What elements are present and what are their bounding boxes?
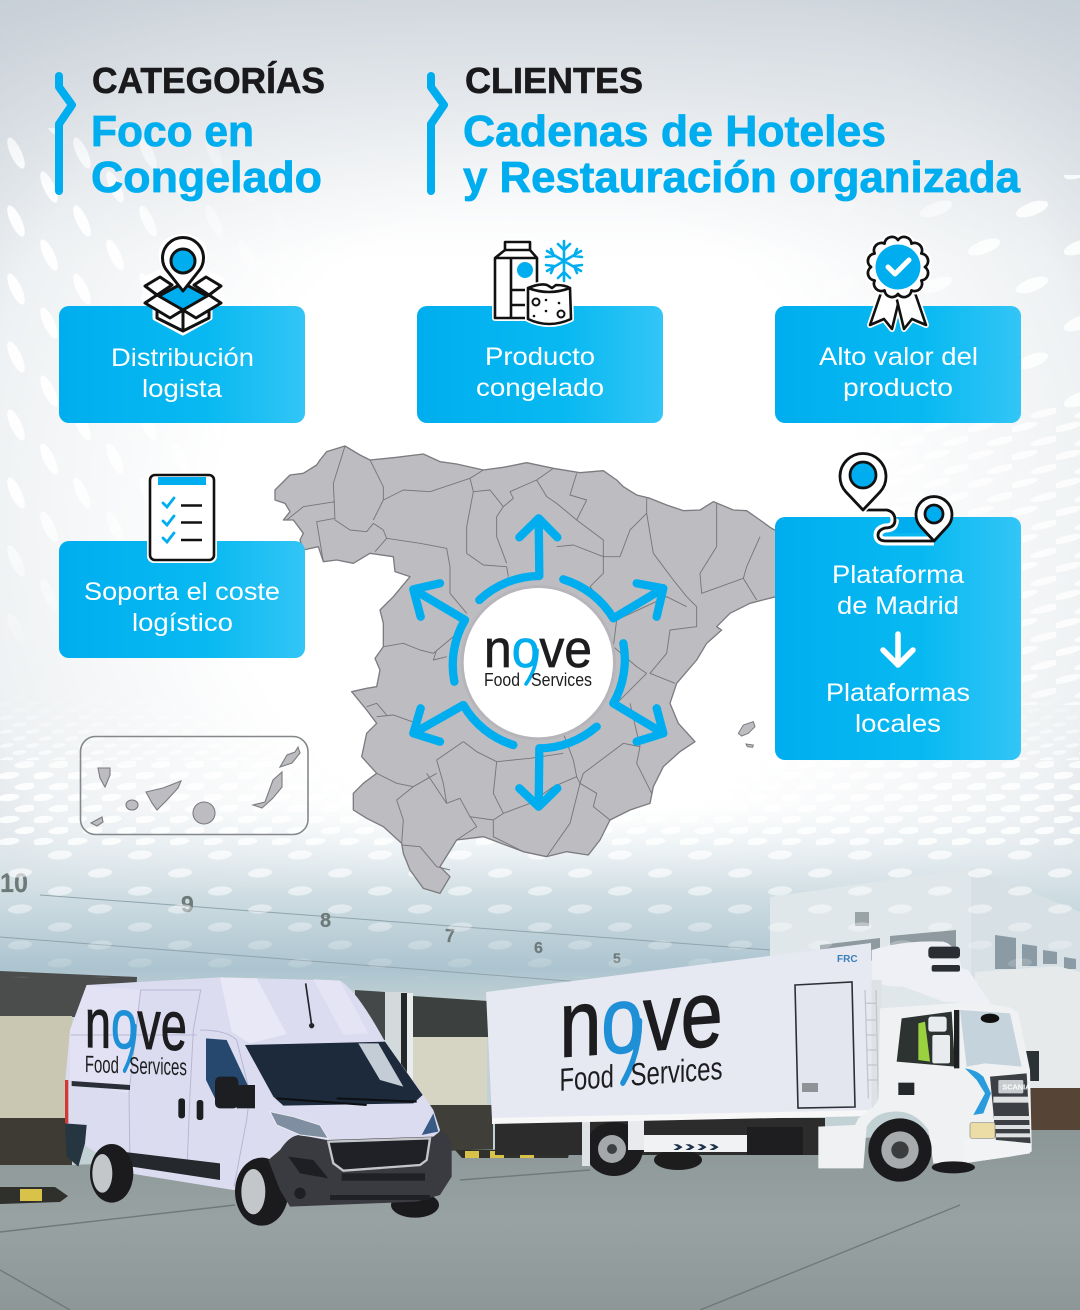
arrow south-east — [613, 643, 663, 742]
chevron bar — [431, 76, 444, 191]
panel: alto valor del producto: producto — [843, 374, 953, 402]
chassis — [495, 1118, 825, 1155]
distribution arrows — [413, 518, 663, 807]
cab and reefer unit — [818, 941, 1032, 1182]
panel: plataforma de madrid: Plataformas — [826, 679, 970, 707]
dock numbers: 6 — [534, 940, 543, 957]
rear bumper — [65, 1123, 87, 1167]
roof panels — [220, 977, 287, 1043]
door handles — [178, 1098, 185, 1118]
island: la palma — [98, 768, 110, 787]
arrow: down — [883, 634, 913, 665]
lower dot pattern — [0, 738, 1080, 978]
cheese — [528, 284, 571, 324]
island: el hierro — [91, 817, 103, 826]
icon: box with location pin — [143, 236, 222, 333]
grille — [990, 1073, 1031, 1148]
arrow north-west — [413, 583, 465, 682]
heading: clientes: y Restauración organizada — [463, 153, 1021, 202]
van far wheel — [391, 1192, 439, 1218]
office windows — [995, 935, 1076, 969]
chevron bar — [59, 76, 72, 191]
panel: soporta el coste logístico: logístico — [132, 609, 233, 637]
center logo: Services — [531, 670, 592, 690]
body panel lines — [71, 990, 250, 1187]
center logo: nove — [484, 620, 592, 679]
van body — [65, 977, 440, 1190]
province borders — [287, 446, 760, 870]
side window — [206, 1038, 250, 1100]
milk carton — [495, 242, 537, 318]
arrow south — [519, 727, 597, 807]
cab window — [897, 1012, 955, 1067]
island: gran canaria — [193, 802, 215, 824]
windshield — [960, 1010, 1022, 1067]
island: tenerife — [146, 781, 181, 810]
dock numbers: 7 — [445, 926, 455, 946]
side trim — [122, 1152, 220, 1180]
heading: categorías: Foco en — [91, 107, 254, 156]
headlight — [970, 1123, 995, 1138]
panel: plataforma de madrid: Plataforma — [832, 561, 964, 589]
rear rail and lamp — [72, 1081, 130, 1090]
island: lanzarote — [280, 747, 300, 767]
peninsula outline — [275, 446, 783, 893]
island: fuerteventura — [253, 772, 282, 808]
panel: producto congelado: Producto — [485, 343, 595, 371]
truck rear wheel — [585, 1122, 643, 1176]
office building — [770, 868, 1080, 1100]
truck door — [795, 982, 855, 1108]
truck logo: Services — [630, 1051, 723, 1093]
icon: checklist clipboard — [147, 472, 217, 563]
delivery van — [65, 977, 452, 1226]
arrow north — [479, 518, 557, 600]
arrow north-east — [563, 579, 663, 618]
heading: clientes — [431, 60, 1021, 202]
heading: clientes: Cadenas de Hoteles — [463, 107, 886, 156]
dock numbers: 5 — [613, 950, 621, 966]
yellow curbs — [0, 1150, 570, 1204]
van logo: Food — [85, 1051, 119, 1079]
panel: producto congelado: congelado — [476, 374, 604, 402]
Balearic islands — [738, 722, 755, 747]
van front wheel — [235, 1158, 288, 1226]
icon: route between pins — [839, 451, 952, 541]
van rear wheel — [90, 1144, 133, 1203]
windshield — [245, 1042, 423, 1106]
heading: categorías: CATEGORÍAS — [92, 60, 325, 101]
side skirt: ›››› — [672, 1138, 720, 1155]
loading docks — [0, 971, 137, 1017]
van logo: nove — [85, 984, 187, 1065]
heading: clientes: CLIENTES — [465, 60, 643, 101]
van logo: Services — [129, 1053, 187, 1081]
side skirt — [644, 1135, 747, 1155]
panel: soporta el coste logístico: Soporta el coste — [84, 578, 280, 606]
cab and reefer unit: SCANIA — [1002, 1082, 1031, 1091]
panel: plataforma de madrid — [775, 517, 1021, 760]
truck body — [486, 943, 872, 1120]
delivery truck: FRC — [837, 954, 858, 965]
panel: distribución logista: logista — [142, 375, 222, 403]
delivery truck — [486, 941, 1032, 1182]
warehouse wall — [0, 805, 1080, 1170]
truck front wheel — [868, 1118, 975, 1182]
heading: categorías — [59, 60, 325, 202]
map of Spain — [275, 446, 783, 893]
panel: distribución logista — [59, 306, 305, 423]
panel: soporta el coste logístico — [59, 541, 305, 658]
panel: distribución logista: Distribución — [111, 344, 254, 372]
snowflake — [546, 241, 582, 281]
cab stripe — [965, 1068, 991, 1115]
truck logo: nove — [559, 960, 723, 1078]
van headlights — [270, 1112, 328, 1138]
panel: plataforma de madrid: de Madrid — [837, 592, 959, 620]
panel: canary islands inset — [80, 736, 308, 834]
panel: producto congelado — [417, 306, 663, 423]
panel: plataforma de madrid: locales — [855, 710, 941, 738]
icon: frozen products — [495, 241, 582, 324]
logo ring — [461, 585, 616, 740]
background dot pattern — [0, 128, 1080, 705]
cab body — [818, 1002, 1032, 1168]
heading: categorías: Congelado — [91, 153, 322, 202]
panel: alto valor del producto: Alto valor del — [819, 343, 978, 371]
van bumper — [268, 1130, 452, 1207]
arrow south-west — [413, 705, 513, 745]
mirror — [215, 1077, 238, 1108]
warehouse photo backdrop — [0, 805, 1080, 1310]
icon: award rosette — [868, 237, 928, 329]
dock numbers — [0, 868, 621, 966]
island: la gomera — [126, 800, 138, 810]
antenna — [306, 983, 312, 1025]
panel: alto valor del producto — [775, 306, 1021, 423]
van grille — [328, 1138, 430, 1171]
dock numbers: 10 — [0, 868, 28, 898]
yard pavement — [0, 1130, 1080, 1310]
ladder — [865, 990, 878, 1098]
dock numbers: 8 — [320, 910, 331, 932]
center logo: Food — [484, 670, 520, 690]
truck logo: Food — [559, 1059, 614, 1098]
refrigeration unit — [872, 941, 992, 1005]
dock numbers: 9 — [181, 891, 194, 917]
